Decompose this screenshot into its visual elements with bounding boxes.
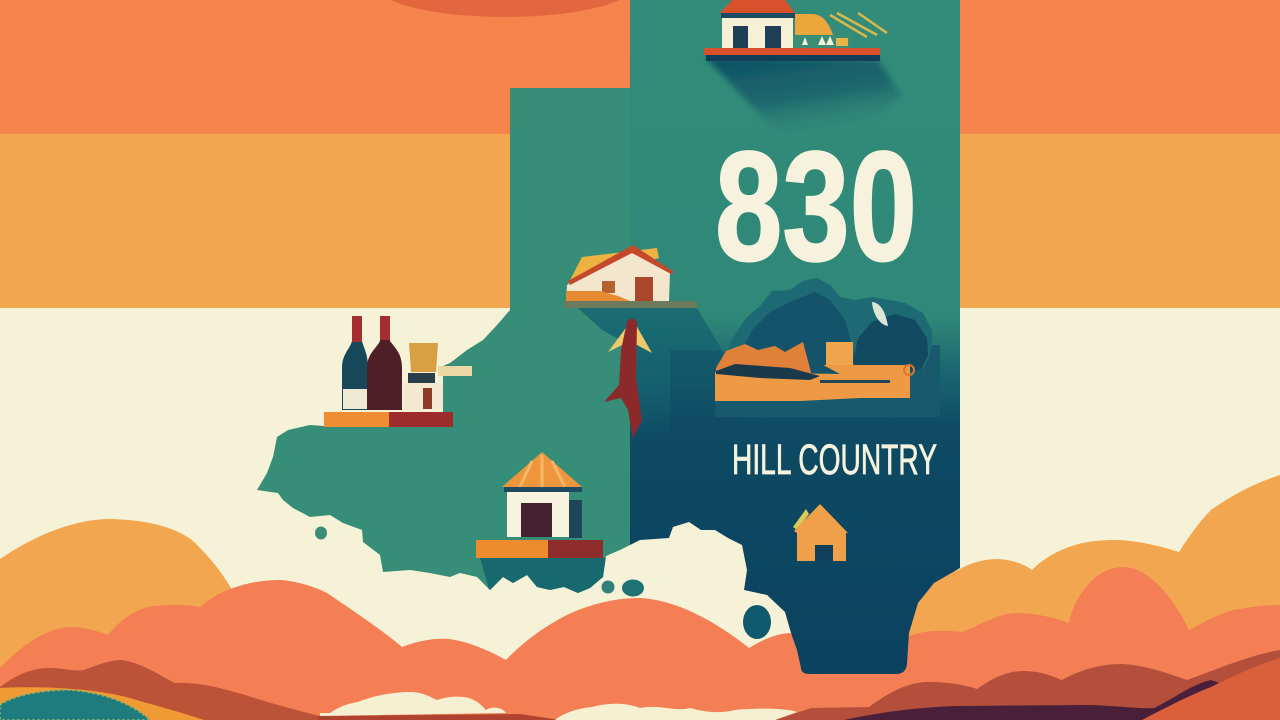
back hills right: [907, 475, 1280, 720]
dark ridge: [844, 680, 1222, 720]
foreground hills left: [0, 660, 560, 720]
shadow: mid house: [578, 308, 722, 362]
bush: orange ground: [0, 687, 204, 720]
cloud left: [320, 692, 506, 716]
shadow: lower house: [480, 558, 606, 593]
red strip: [318, 714, 560, 720]
icon: lower house on shelf: [476, 452, 603, 558]
subtitle: HILL COUNTRY: [732, 436, 937, 484]
front red slope: [1142, 658, 1280, 720]
map of the 830 region: [250, 0, 960, 720]
icon: small orange house: [793, 504, 848, 561]
map islands: [315, 526, 771, 639]
coral hills: [0, 567, 1280, 720]
cloud right: [555, 704, 797, 720]
icon: red tree with yellow canopy: [604, 318, 652, 438]
shadow: mid house darker right side: [670, 350, 724, 410]
big area code number: 830: [715, 120, 917, 294]
icon: wine bottles on shelf: [324, 316, 472, 427]
icon: hill country landscape: [715, 278, 940, 417]
back hills left: [0, 519, 232, 720]
icon: upper house and vineyard: [704, 0, 887, 61]
bush: teal shrub: [0, 690, 150, 720]
icon: middle house: [564, 245, 697, 308]
foreground hills right: [775, 650, 1280, 720]
shelf shadow: upper house: [704, 56, 900, 124]
